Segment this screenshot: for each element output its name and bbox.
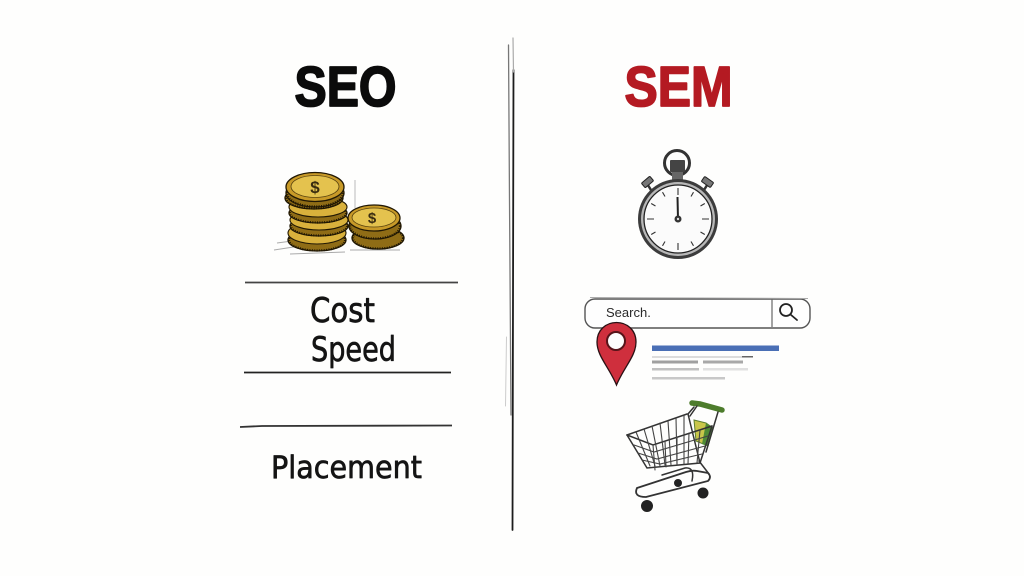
center divider line: [506, 38, 514, 530]
icon: stopwatch: [638, 150, 718, 259]
icon: magnifier: [780, 304, 797, 320]
search results lines: [652, 346, 779, 380]
cart wheels: [642, 480, 708, 512]
dial ticks: [647, 188, 709, 250]
right coin stack: $: [368, 210, 377, 227]
text: Placement: Placement: [271, 450, 422, 486]
left coin stack: $: [310, 178, 320, 197]
divider: lower row line: [240, 426, 452, 427]
search bar: [585, 298, 810, 328]
text: Cost: Cost: [310, 291, 375, 331]
divider: middle row line: [244, 372, 451, 374]
wire grid: [634, 415, 708, 470]
cart base: [636, 461, 710, 497]
cart frame: [627, 406, 718, 468]
title: SEO heading: SEO: [294, 55, 396, 119]
icon: shopping cart: [627, 403, 722, 512]
title: SEM heading: SEM: [624, 55, 732, 119]
divider: top row line: [245, 282, 458, 284]
green item in cart: [694, 420, 713, 446]
icon: stack of gold coins: [274, 172, 404, 254]
search placeholder text: Search.: [606, 305, 651, 320]
text: Speed: Speed: [311, 330, 396, 370]
green handle: [692, 403, 722, 410]
icon: location pin: [597, 322, 636, 385]
